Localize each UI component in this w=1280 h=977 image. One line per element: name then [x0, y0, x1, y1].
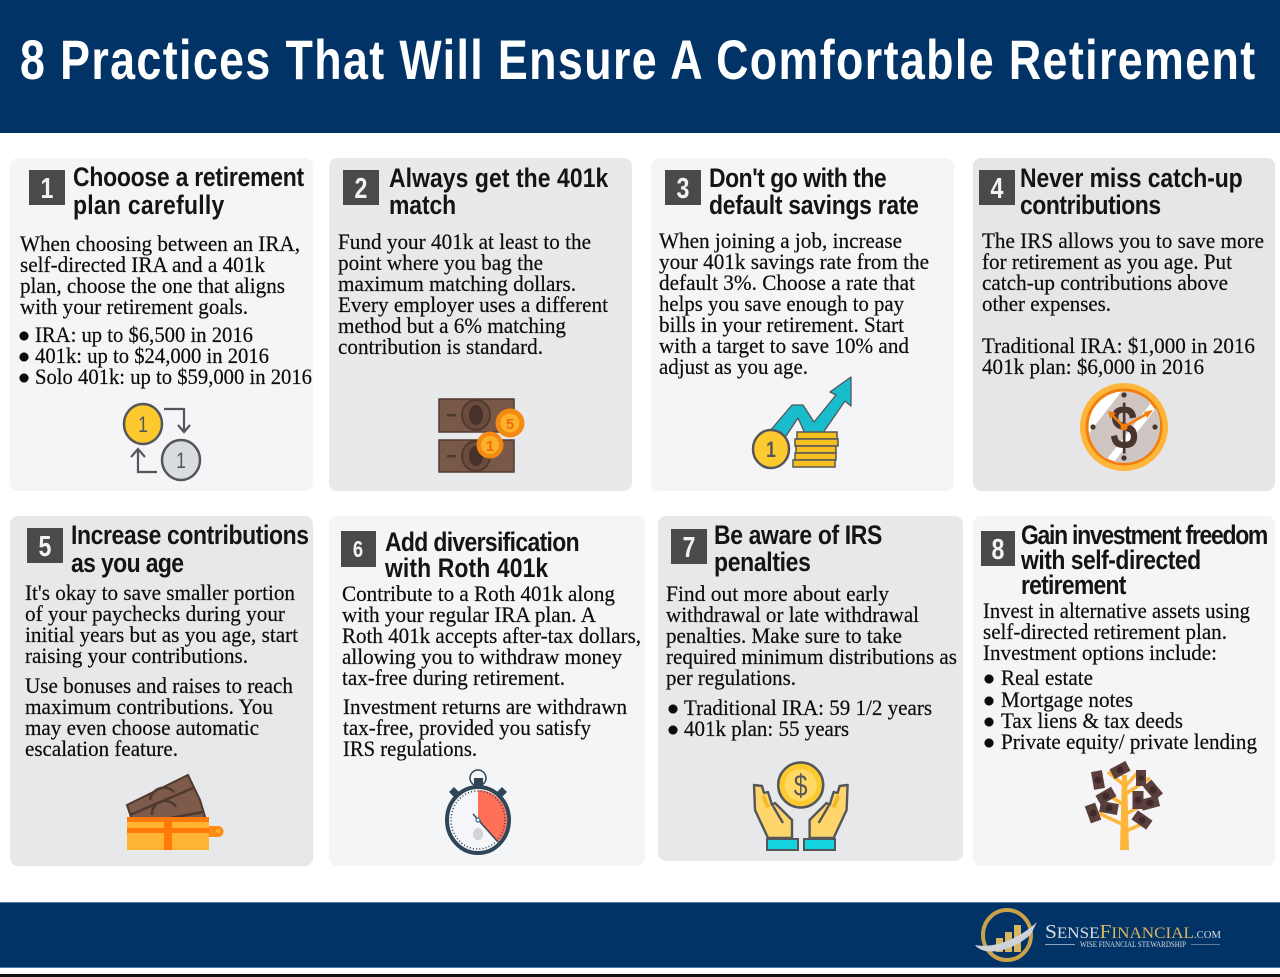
bullet list 8: Tax liens & tax deeds — [1001, 708, 1183, 733]
icon: stopwatch — [447, 770, 509, 853]
heading 3: Don't go with the — [709, 163, 887, 193]
number badge 7 — [671, 529, 707, 564]
logo tagline: WISE FINANCIAL STEWARDSHIP — [1080, 940, 1186, 949]
icon: exchanging coins: 1 — [138, 413, 148, 438]
body text 1: When choosing between an IRA, — [20, 231, 300, 256]
body text 6: allowing you to withdraw money — [342, 644, 622, 669]
body text 7 — [666, 581, 957, 690]
body text 4: for retirement as you age. Put — [982, 249, 1232, 274]
heading 7: penalties — [714, 547, 811, 577]
number badge 6 — [341, 531, 376, 567]
body text 5: Use bonuses and raises to reach — [25, 673, 293, 698]
body text 2 — [338, 229, 608, 359]
body text 3: with a target to save 10% and — [659, 333, 909, 358]
heading 6: Add diversification — [385, 527, 580, 557]
body text 4: catch-up contributions above — [982, 270, 1228, 295]
icon: dollar clock: $ — [1110, 393, 1138, 462]
body text 5: It's okay to save smaller portion — [25, 580, 295, 605]
bullet list 1: 401k: up to $24,000 in 2016 — [35, 343, 269, 368]
bullet list 1 — [20, 322, 312, 389]
number badge 4: 4 — [991, 171, 1004, 205]
heading 1 — [73, 162, 305, 220]
body text 3 — [659, 228, 929, 379]
header band with title — [0, 0, 1280, 133]
body text 3: When joining a job, increase — [659, 228, 902, 253]
icon: rising arrow with coins — [753, 377, 851, 468]
body text 2: method but a 6% matching — [338, 313, 566, 338]
panel 6: diversification — [329, 516, 645, 866]
bullet list 8 — [984, 665, 1257, 754]
heading 6 — [384, 527, 580, 583]
number badge 6: 6 — [353, 537, 363, 563]
panel 3: default savings rate — [651, 158, 954, 491]
heading 6: with Roth 401k — [384, 553, 548, 583]
logo: Sense Financial — [975, 910, 1221, 960]
heading 7 — [714, 520, 882, 577]
title: 8 Practices That Will Ensure A Comfortable Retirement — [20, 28, 1255, 91]
body text 4: other expenses. — [982, 291, 1111, 316]
number badge 7: 7 — [683, 530, 695, 564]
icon: hands holding coin: $ — [794, 768, 808, 803]
heading 8 — [1020, 520, 1268, 600]
body text 8: Investment options include: — [983, 640, 1217, 665]
number badge 3 — [665, 170, 701, 205]
icon: rising arrow with coins: 1 — [766, 438, 776, 463]
panel 7: IRS penalties — [658, 516, 963, 861]
body text 4: The IRS allows you to save more — [982, 228, 1264, 253]
body text 6: IRS regulations. — [343, 736, 477, 761]
heading 5: Increase contributions — [71, 520, 309, 550]
body text 2: point where you bag the — [338, 250, 543, 275]
footer band — [0, 902, 1280, 968]
icon: banknotes and coins — [439, 399, 524, 472]
body text 8 — [983, 598, 1250, 665]
body text 5: maximum contributions. You — [25, 694, 273, 719]
body text 2: contribution is standard. — [338, 334, 543, 359]
body text 2: Fund your 401k at least to the — [338, 229, 591, 254]
number badge 8 — [981, 531, 1015, 566]
body text 3: default 3%. Choose a rate that — [659, 270, 915, 295]
body text 8: Invest in alternative assets using — [983, 598, 1250, 623]
heading 4 — [1020, 163, 1243, 220]
heading 2 — [389, 163, 608, 220]
bullet list 7 — [668, 695, 932, 741]
body text 1: with your retirement goals. — [20, 294, 248, 319]
body text 7: Find out more about early — [666, 581, 889, 606]
body text 2: Every employer uses a different — [338, 292, 608, 317]
number badge 3: 3 — [677, 171, 689, 205]
body text 6 — [342, 581, 641, 761]
body text 3: helps you save enough to pay — [659, 291, 904, 316]
heading 7: Be aware of IRS — [714, 520, 882, 550]
bullet list 1: Solo 401k: up to $59,000 in 2016 — [35, 364, 312, 389]
heading 1: Chooose a retirement — [73, 162, 305, 192]
icon: hands holding coin — [754, 762, 848, 850]
heading 4: contributions — [1020, 190, 1161, 220]
body text 1: plan, choose the one that aligns — [20, 273, 285, 298]
heading 8: with self-directed — [1020, 545, 1201, 575]
heading 4: Never miss catch-up — [1020, 163, 1243, 193]
body text 6: tax-free during retirement. — [342, 665, 565, 690]
number badge 2 — [343, 170, 379, 205]
bullet list 7: Traditional IRA: 59 1/2 years — [684, 695, 932, 720]
icon: banknotes and coins: 1 — [486, 438, 494, 455]
bullet list 8: Real estate — [1001, 665, 1093, 690]
number badge 1: 1 — [41, 171, 53, 205]
icon: money tree — [1085, 761, 1163, 850]
number badge 5: 5 — [39, 529, 51, 563]
heading 8: retirement — [1021, 570, 1127, 600]
body text 5: raising your contributions. — [25, 643, 248, 668]
body text 7: withdrawal or late withdrawal — [666, 602, 919, 627]
number badge 1 — [29, 170, 65, 205]
bullet list 7: 401k plan: 55 years — [684, 716, 849, 741]
body text 3: your 401k savings rate from the — [659, 249, 929, 274]
number badge 4 — [979, 170, 1015, 205]
panel 5: increase contributions — [10, 516, 313, 866]
heading 2: match — [389, 190, 456, 220]
body text 4 — [982, 228, 1264, 379]
body text 1 — [20, 231, 300, 319]
panel 4: catch-up contributions — [973, 158, 1275, 491]
icon: exchanging coins — [124, 404, 200, 480]
number badge 8: 8 — [992, 532, 1004, 566]
panel 1: choose a retirement plan — [10, 158, 313, 491]
body text 5: escalation feature. — [25, 736, 178, 761]
heading 5: as you age — [71, 548, 184, 578]
heading 8: Gain investment freedom — [1021, 520, 1268, 550]
body text 6: Contribute to a Roth 401k along — [342, 581, 615, 606]
body text 8: self-directed retirement plan. — [983, 619, 1227, 644]
heading 1: plan carefully — [73, 190, 224, 220]
logo emblem — [975, 910, 1037, 960]
number badge 2: 2 — [355, 171, 367, 205]
body text 5: initial years but as you age, start — [25, 622, 298, 647]
body text 3: bills in your retirement. Start — [659, 312, 904, 337]
heading 5 — [71, 520, 309, 578]
bullet list 8: Mortgage notes — [1001, 687, 1133, 712]
body text 6: Roth 401k accepts after-tax dollars, — [342, 623, 641, 648]
heading 3: default savings rate — [709, 190, 919, 220]
logo wordmark: SENSEFINANCIAL .COM — [1045, 921, 1221, 943]
heading 3 — [709, 163, 919, 220]
body text 6: Investment returns are withdrawn — [343, 694, 627, 719]
body text 5: of your paychecks during your — [25, 601, 286, 626]
body text 1: self-directed IRA and a 401k — [20, 252, 265, 277]
body text 4: 401k plan: $6,000 in 2016 — [982, 354, 1204, 379]
body text 7: required minimum distributions as — [666, 644, 957, 669]
icon: exchanging coins: 1 — [176, 449, 186, 474]
bullet list 1: IRA: up to $6,500 in 2016 — [35, 322, 253, 347]
number badge 5 — [27, 528, 63, 563]
panel 8: investment freedom — [973, 516, 1275, 866]
body text 5 — [25, 580, 298, 761]
bullet list 8: Private equity/ private lending — [1001, 729, 1257, 754]
body text 6: tax-free, provided you satisfy — [343, 715, 591, 740]
body text 2: maximum matching dollars. — [338, 271, 576, 296]
icon: dollar clock — [1080, 383, 1168, 471]
body text 6: with your regular IRA plan. A — [342, 602, 596, 627]
heading 2: Always get the 401k — [389, 163, 608, 193]
body text 4: Traditional IRA: $1,000 in 2016 — [982, 333, 1255, 358]
body text 5: may even choose automatic — [25, 715, 259, 740]
icon: wallet with banknotes — [127, 775, 224, 850]
body text 7: penalties. Make sure to take — [666, 623, 902, 648]
icon: banknotes and coins: 5 — [506, 416, 514, 433]
panel 2: always get the 401k match — [329, 158, 632, 491]
body text 3: adjust as you age. — [659, 354, 808, 379]
body text 7: per regulations. — [666, 665, 796, 690]
